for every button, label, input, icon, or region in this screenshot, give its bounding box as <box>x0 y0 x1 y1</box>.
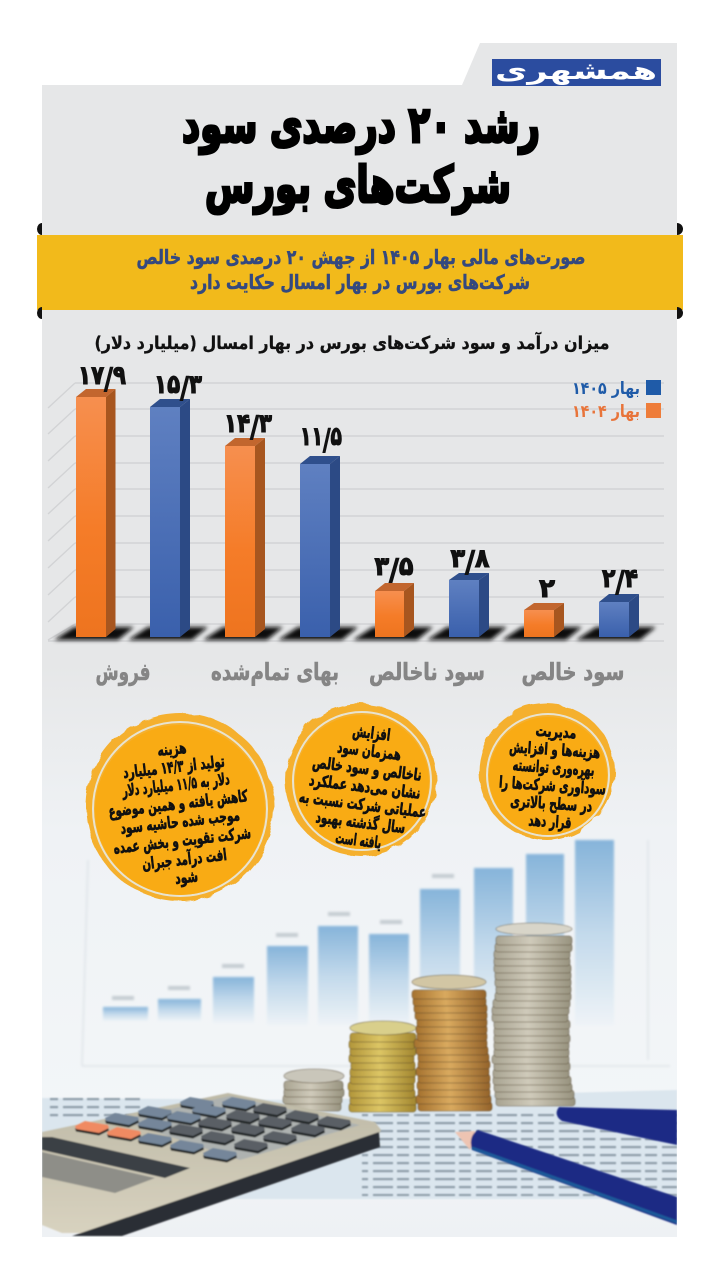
logo: Hamshahri <box>492 57 661 86</box>
value labels: ۵ <box>399 552 414 582</box>
photo: pencil <box>455 1130 677 1225</box>
calculator keys <box>75 1097 351 1162</box>
subtitle band: شرکت‌های بورس در بهار امسال حکایت دارد <box>190 270 530 294</box>
callout: gross and net profit circle: نشان می‌دهد عملکرد <box>308 770 422 803</box>
bar: cost 1405 <box>300 456 340 637</box>
chart heading: میزان درآمد و سود شرکت‌های بورس در بهار امسال (میلیارد دلار) <box>94 331 610 354</box>
callout: net profit circle <box>479 704 615 840</box>
callout: gross and net profit circle: همزمان سود <box>336 737 402 764</box>
callout: cost circle: موجب شده حاشیه سود <box>119 805 241 838</box>
photo: pen <box>557 1107 677 1145</box>
title: شرکت‌های بورس <box>205 156 511 215</box>
callout: gross and net profit circle: عملیاتی شرکت نسبت به <box>298 787 427 822</box>
value labels: ۵ <box>331 422 342 452</box>
value labels: ۱۴ <box>224 409 256 439</box>
bar: gross profit 1404 <box>375 583 414 637</box>
callout: gross and net profit circle: یافته است <box>334 828 382 852</box>
callout: cost circle: شود <box>174 866 199 888</box>
coins: small silver <box>283 1069 344 1111</box>
bar: cost 1404 <box>225 438 265 637</box>
value labels: ۱۱ <box>300 422 332 452</box>
callout: cost circle: تولید از ۱۴/۳ میلیارد <box>122 752 226 782</box>
callout: gross and net profit circle: ناخالص و سود خالص <box>311 752 423 785</box>
logo: Hamshahri: همشهری <box>495 57 657 85</box>
callout: gross and net profit circle: سال گذشته بهبود <box>315 807 406 837</box>
value labels: ۱۵ <box>154 370 186 400</box>
coins: large silver <box>492 923 575 1106</box>
category labels: سود ناخالص <box>369 658 485 686</box>
callout: cost circle <box>86 713 274 901</box>
background photo: finance desk <box>42 840 677 1236</box>
subtitle band <box>37 223 683 319</box>
value labels: ۱۷ <box>78 361 110 391</box>
legend: بهار ۱۴۰۵ <box>572 379 640 399</box>
title <box>182 96 540 215</box>
photo: paper sheet <box>42 1090 677 1199</box>
callout: cost circle: دلار به ۱۱/۵ میلیارد دلار <box>121 769 231 800</box>
photo: calculator <box>42 1093 381 1236</box>
category labels: فروش <box>96 658 150 686</box>
callout: net profit circle: سودآوری شرکت‌ها را <box>498 771 607 799</box>
title: رشد ۲۰ درصدی سود <box>182 96 540 155</box>
value labels: ۲ <box>602 564 618 594</box>
subtitle band: صورت‌های مالی بهار ۱۴۰۵ از جهش ۲۰ درصدی سود خالص <box>136 245 586 269</box>
bar chart <box>54 389 656 640</box>
callout: gross and net profit circle <box>285 704 437 857</box>
bar: net profit 1405 <box>599 594 639 637</box>
callout: net profit circle: در سطح بالاتری <box>510 791 593 816</box>
callout: cost circle: کاهش یافته و همین موضوع <box>107 786 249 821</box>
photo: blurred bar chart <box>82 840 670 1066</box>
value labels: / <box>250 410 259 444</box>
bar: net profit 1404 <box>524 603 564 637</box>
category labels <box>96 658 624 686</box>
bar: sales 1405 <box>150 399 190 637</box>
bar: gross profit 1405 <box>449 573 489 637</box>
value labels: / <box>323 423 331 457</box>
category labels: سود خالص <box>522 658 624 686</box>
value labels: ۳ <box>259 409 272 439</box>
coins: bronze <box>412 975 492 1111</box>
value labels: / <box>104 362 113 396</box>
value labels: ۳ <box>450 544 466 574</box>
callout: net profit circle: بهره‌وری توانسته <box>512 755 595 780</box>
callout: net profit circle: قرار دهد <box>528 810 572 832</box>
callout: cost circle: افت درآمد جبران <box>141 844 228 873</box>
callout: net profit circle: مدیریت <box>535 721 577 742</box>
value labels: ۳ <box>189 370 202 400</box>
legend: بهار ۱۴۰۴ <box>572 402 640 422</box>
value labels: / <box>465 545 475 579</box>
photo: coin stacks <box>283 923 575 1112</box>
category labels: بهای تمام‌شده <box>211 658 339 686</box>
value labels: / <box>389 553 399 587</box>
value labels: / <box>615 565 625 599</box>
callout: cost circle: هزینه <box>156 738 187 760</box>
value labels: ۸ <box>475 544 490 574</box>
value labels <box>78 361 638 604</box>
value labels: / <box>180 371 189 405</box>
value labels: ۹ <box>113 361 126 391</box>
callout: net profit circle: هزینه‌ها و افزایش <box>509 737 601 762</box>
callout: cost circle: شرکت تقویت و بخش عمده <box>113 823 252 858</box>
legend <box>572 379 661 422</box>
value labels: ۳ <box>374 552 390 582</box>
callout: gross and net profit circle: افزایش <box>352 721 392 745</box>
value labels: ۲ <box>539 574 555 604</box>
bar: sales 1404 <box>76 389 116 637</box>
value labels: ۴ <box>625 564 638 594</box>
coins: gold <box>348 1021 417 1112</box>
